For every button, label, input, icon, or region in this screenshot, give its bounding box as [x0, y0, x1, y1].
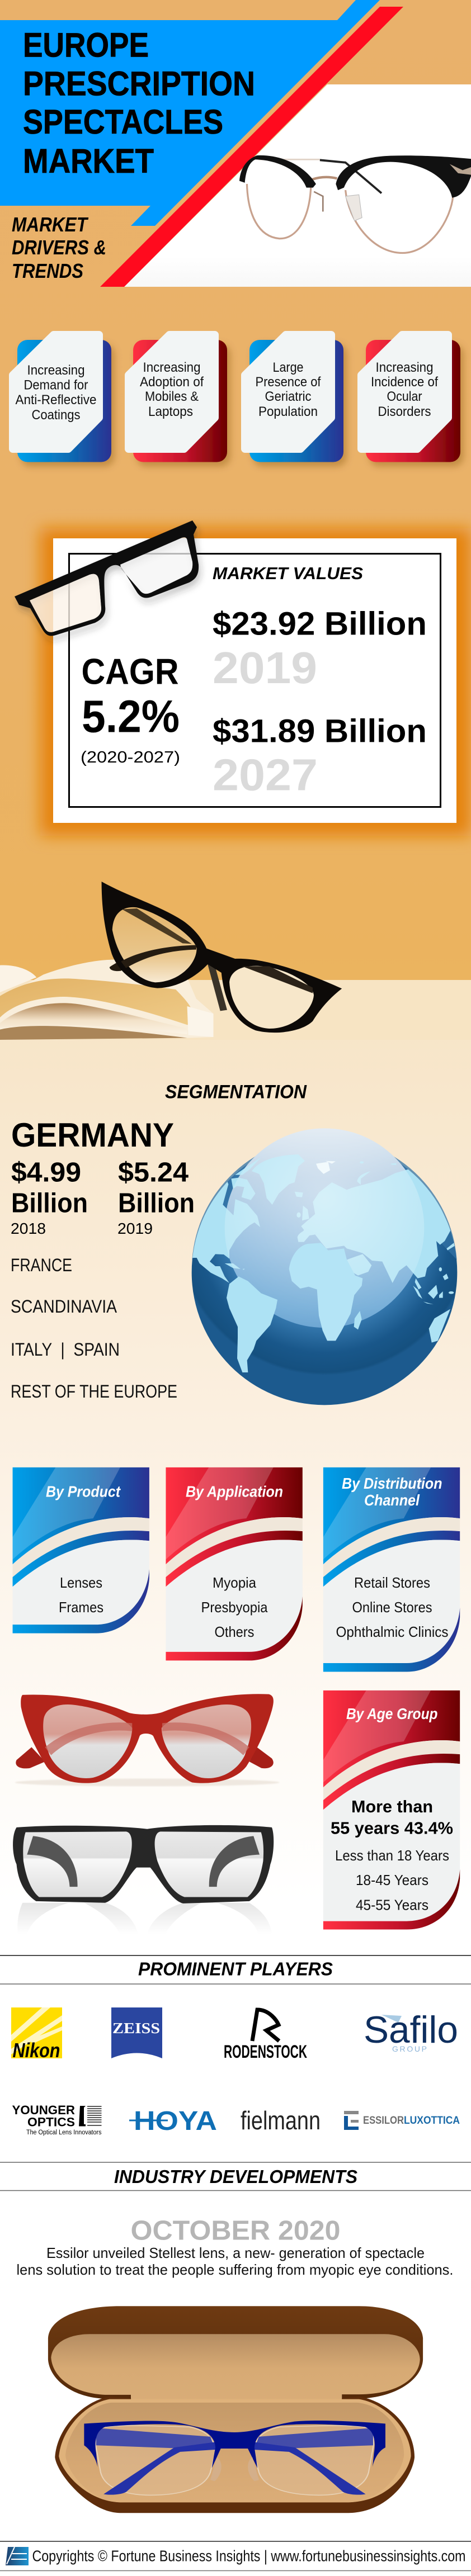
heading: prominent players: PROMINENT PLAYERS: [138, 1959, 333, 1979]
development description: lens solution to treat the people suffering from myopic eye conditions.: [17, 2261, 453, 2278]
segment card: by product: Lenses: [60, 1574, 102, 1591]
value 2027: $31.89 Billion: [213, 713, 427, 749]
segment card: by age group: By Age Group: [346, 1705, 437, 1722]
card: geriatric population: Population: [258, 404, 318, 419]
panel: market values: [15, 520, 471, 836]
section rules: [0, 1955, 471, 1956]
value 2027: [213, 713, 427, 799]
logo: Rodenstock: RODENSTOCK: [224, 2042, 307, 2062]
card: anti-reflective coatings: [13, 335, 111, 462]
cat-eye glasses: [102, 882, 342, 1033]
footer rules: [0, 2541, 471, 2542]
photo panel: [124, 84, 471, 287]
logo: Zeiss: ZEISS: [112, 2020, 160, 2037]
logo: Younger Optics: The Optical Lens Innovators: [26, 2129, 102, 2136]
icon: red cat-eye glasses: [15, 1694, 279, 1786]
logo: Younger Optics: YOUNGER: [12, 2103, 75, 2117]
logo: Fielmann: fielmann: [241, 2106, 321, 2135]
icon: globe: [190, 1128, 457, 1405]
card: anti-reflective coatings: Anti-Reflective: [16, 392, 96, 408]
illustration: glasses in open case: [48, 2306, 423, 2513]
segment card: by distribution channel: Ophthalmic Clinics: [336, 1623, 449, 1640]
segment card: by age group: More than: [351, 1797, 433, 1816]
logo: Safilo: GROUP: [392, 2044, 427, 2053]
photo: open book with cat-eye glasses: [0, 882, 342, 1040]
other regions: REST OF THE EUROPE: [11, 1381, 177, 1401]
card: mobiles and laptops: Increasing: [143, 360, 200, 375]
card: mobiles and laptops: Mobiles &: [145, 389, 199, 404]
segment card: by age group: 55 years 43.4%: [331, 1818, 453, 1838]
heading: market values: MARKET VALUES: [213, 564, 363, 583]
other regions: ITALY | SPAIN: [11, 1339, 120, 1360]
section heading: market drivers and trends: [12, 213, 106, 282]
segment card: by application: By Application: [186, 1483, 283, 1500]
segment card: by application: [166, 1467, 303, 1660]
Germany values: $5.24: [118, 1157, 189, 1187]
segment card: by product: By Product: [46, 1483, 121, 1500]
card: mobiles and laptops: Adoption of: [140, 375, 204, 390]
development date: OCTOBER 2020: [131, 2216, 340, 2246]
card: geriatric population: Geriatric: [265, 389, 311, 404]
value 2019: $23.92 Billion: [213, 606, 427, 642]
logo: EssilorLuxottica: LUXOTTICA: [404, 2115, 460, 2127]
logo: EssilorLuxottica: [344, 2111, 460, 2130]
value 2019: [213, 606, 427, 693]
section heading: market drivers and trends: MARKET: [12, 213, 89, 236]
segment card: by age group: 18-45 Years: [356, 1872, 428, 1888]
title: PRESCRIPTION: [23, 65, 255, 103]
other regions: [11, 1255, 177, 1401]
card: ocular disorders: Increasing: [376, 360, 433, 375]
segment card: by age group: [323, 1690, 460, 1929]
card: anti-reflective coatings: Coatings: [31, 408, 81, 423]
card: anti-reflective coatings: Demand for: [23, 378, 88, 392]
segment card: by application: Presbyopia: [201, 1599, 268, 1616]
segment card: by application: Myopia: [213, 1574, 256, 1591]
segment card: by age group: Less than 18 Years: [335, 1847, 449, 1864]
case base: [55, 2397, 415, 2513]
card: ocular disorders: Incidence of: [371, 375, 438, 390]
icon: black square glasses: [13, 1825, 274, 1934]
CAGR: CAGR: [82, 651, 179, 692]
Germany values: 2018: [11, 1220, 46, 1237]
section heading: market drivers and trends: DRIVERS &: [12, 236, 106, 259]
card: anti-reflective coatings: Increasing: [27, 363, 85, 378]
logo: Nikon: Nikon: [12, 2039, 60, 2062]
logo: Younger Optics: OPTICS: [27, 2115, 75, 2129]
development description: Essilor unveiled Stellest lens, a new- generation of spectacle: [46, 2244, 425, 2261]
case lid: [48, 2306, 423, 2399]
Germany values: [11, 1116, 195, 1237]
logo: Hoya: HOYA: [134, 2106, 217, 2136]
development description: [17, 2244, 453, 2278]
card: geriatric population: [245, 335, 343, 462]
logo: Safilo: Safilo: [364, 2009, 458, 2051]
CAGR: 5.2%: [82, 691, 180, 742]
card: geriatric population: Large: [273, 360, 303, 375]
Germany values: $4.99: [11, 1157, 81, 1187]
value 2027: 2027: [213, 750, 318, 799]
footer logo: [6, 2547, 29, 2565]
card: mobiles and laptops: Laptops: [148, 404, 193, 419]
photo: floor behind book: [0, 980, 471, 1040]
value 2019: 2019: [213, 643, 317, 693]
heading: segmentation: SEGMENTATION: [165, 1081, 307, 1102]
card: geriatric population: Presence of: [255, 375, 321, 390]
card: ocular disorders: Disorders: [378, 404, 431, 419]
icon: browline spectacles photo: [239, 155, 471, 253]
segment card: by application: Others: [215, 1623, 254, 1640]
title: MARKET: [23, 142, 154, 180]
segment card: by distribution channel: By Distribution: [342, 1475, 442, 1492]
blue title shape: [0, 0, 380, 226]
segment card: by distribution channel: [323, 1467, 460, 1671]
logo: Younger Optics: [12, 2103, 102, 2136]
Germany values: GERMANY: [11, 1116, 174, 1154]
red diagonal stripe: [100, 7, 403, 287]
header banner: [0, 0, 471, 287]
logo: EssilorLuxottica: ESSILOR: [363, 2115, 404, 2127]
Germany values: Billion: [118, 1188, 195, 1219]
card: ocular disorders: Ocular: [387, 389, 422, 404]
logo: Zeiss: [111, 2007, 162, 2058]
title: SPECTACLES: [23, 103, 223, 141]
logo: Rodenstock: [224, 2010, 307, 2062]
card: mobiles and laptops: [129, 335, 227, 462]
segment card: by distribution channel: Retail Stores: [354, 1574, 430, 1591]
logo: Nikon: [11, 2007, 62, 2062]
title: EUROPE: [23, 26, 149, 64]
section heading: market drivers and trends: TRENDS: [12, 259, 83, 282]
segment card: by product: [13, 1467, 149, 1633]
heading: industry developments: INDUSTRY DEVELOPMENTS: [114, 2166, 357, 2187]
Germany values: Billion: [11, 1188, 88, 1219]
segment card: by distribution channel: Channel: [364, 1491, 420, 1509]
CAGR: [81, 651, 180, 766]
card: ocular disorders: [361, 335, 460, 462]
CAGR: (2020-2027): [81, 749, 180, 766]
panel: regional segmentation: [11, 1116, 457, 1405]
other regions: FRANCE: [11, 1255, 72, 1275]
Germany values: 2019: [117, 1220, 153, 1237]
segment card: by product: Frames: [59, 1599, 103, 1616]
title: [23, 26, 255, 180]
blue glasses: [96, 2426, 215, 2495]
segment card: by distribution channel: Online Stores: [352, 1599, 432, 1616]
other regions: SCANDINAVIA: [11, 1296, 117, 1317]
open book: [0, 960, 213, 1040]
segment card: by age group: 45-55 Years: [356, 1896, 428, 1913]
icon: black rectangular glasses: [15, 520, 199, 636]
driver cards: [13, 335, 460, 462]
